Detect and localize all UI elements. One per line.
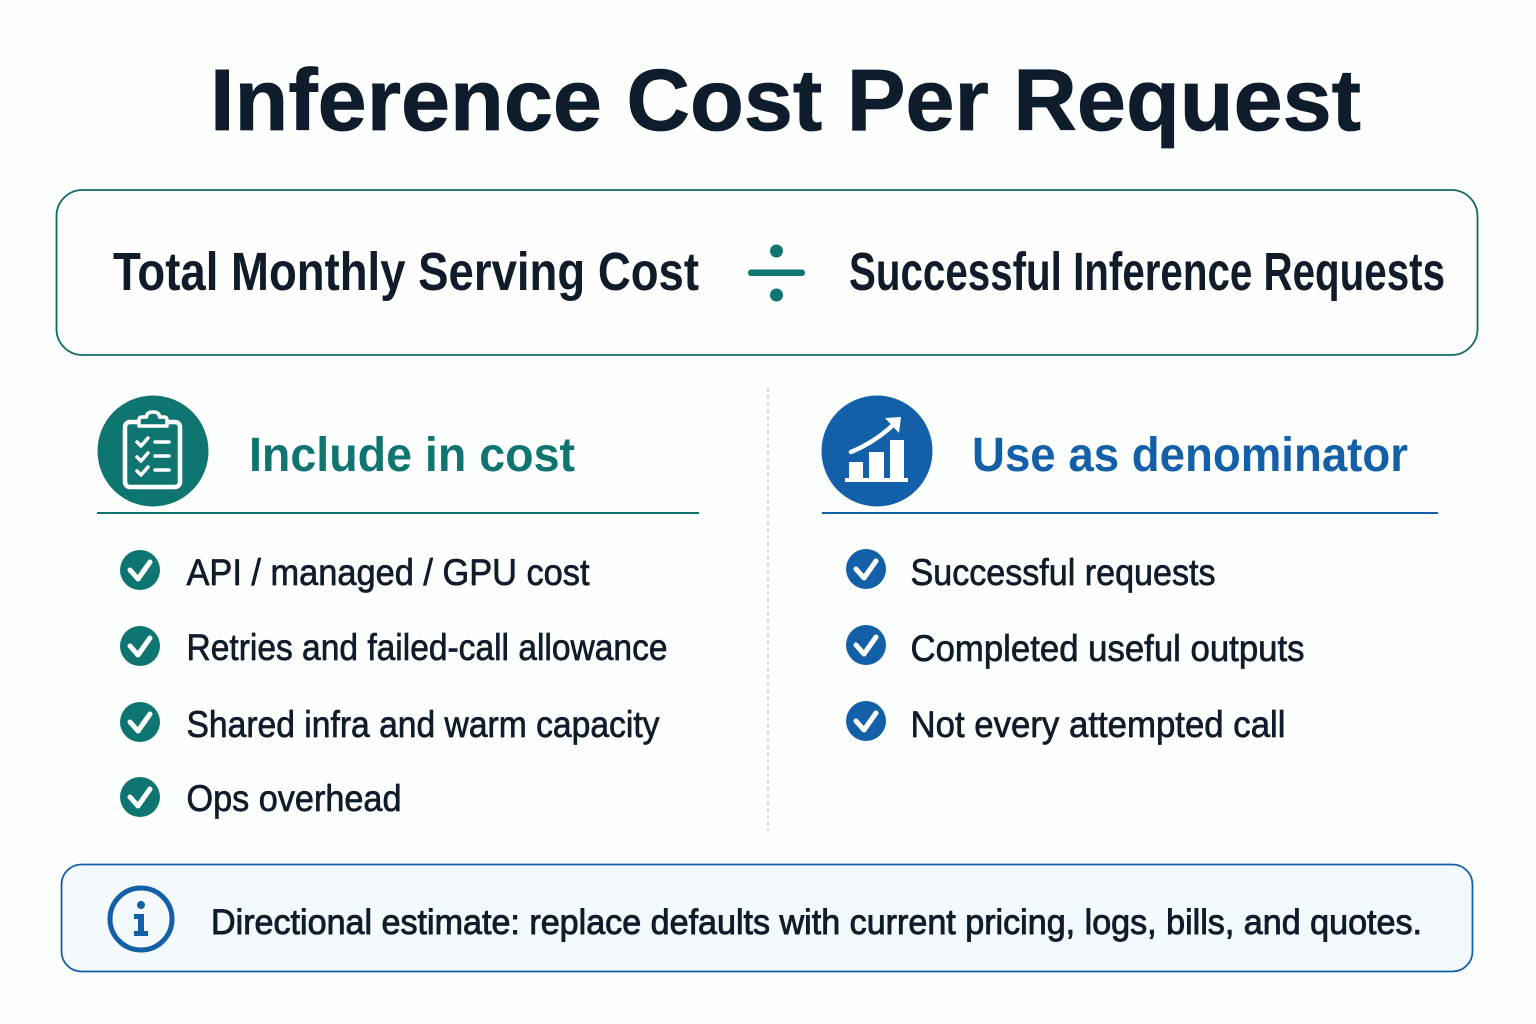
item: not every attempted call: Not every attempted call: [910, 704, 1286, 745]
title: Inference Cost Per Request: [210, 52, 1361, 149]
item: shared infra: Shared infra and warm capacity: [186, 704, 660, 745]
heading: use as denominator: Use as denominator: [972, 429, 1408, 482]
heading: include in cost: Include in cost: [249, 429, 575, 482]
callout text: Directional estimate: replace defaults with current pricing, logs, bills, and quotes.: [211, 903, 1422, 942]
callout: directional estimate: [62, 864, 1472, 972]
formula numerator: Total Monthly Serving Cost: [113, 242, 699, 302]
icon: clipboard checklist: [98, 396, 208, 506]
item: completed outputs: Completed useful outputs: [910, 628, 1304, 669]
item: successful requests: Successful requests: [910, 552, 1216, 593]
item: API cost: API / managed / GPU cost: [186, 552, 590, 593]
panel: formula: [56, 190, 1478, 355]
center divider: [767, 388, 769, 831]
panel: use as denominator: [822, 396, 1438, 745]
icon: rising bar chart: [822, 396, 932, 506]
icon: info: [110, 888, 172, 950]
icon: division sign: [748, 244, 805, 302]
item: ops overhead: Ops overhead: [186, 778, 402, 819]
item: retries: Retries and failed-call allowance: [186, 627, 668, 668]
panel: include in cost: [97, 396, 699, 819]
